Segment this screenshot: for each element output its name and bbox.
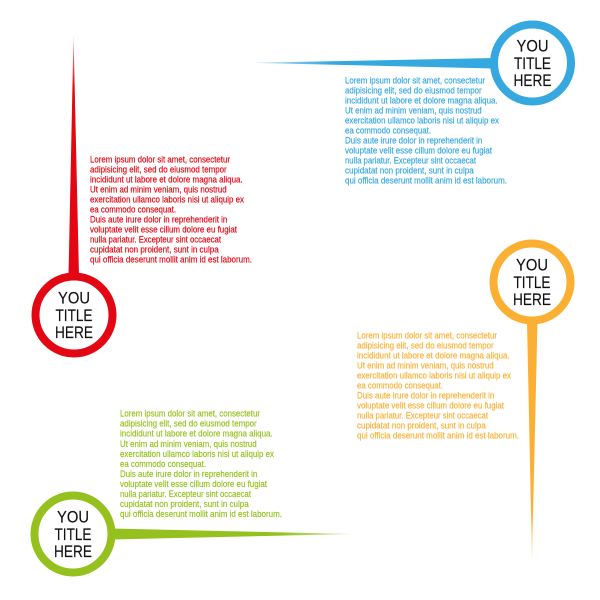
blue title circle — [494, 24, 571, 102]
orange body text: nulla pariatur. Excepteur sint occaecat — [357, 410, 488, 420]
red title circle: TITLE — [56, 307, 92, 325]
orange title circle: HERE — [513, 291, 551, 309]
blue body text: ea commodo consequat. — [345, 126, 431, 136]
green body text — [120, 409, 282, 519]
green body text: Ut enim ad minim veniam, quis nostrud — [120, 439, 257, 449]
green title circle: HERE — [54, 543, 92, 561]
red body text: voluptate velit esse cillum dolore eu fugiat — [90, 224, 237, 234]
red title circle: HERE — [55, 324, 93, 342]
red pointer spike — [68, 35, 79, 276]
blue body text: incididunt ut labore et dolore magna aliqua. — [345, 96, 498, 106]
orange body text: adipisicing elit, sed do eiusmod tempor — [357, 340, 494, 350]
red title circle: YOU — [58, 290, 90, 308]
orange body text: Lorem ipsum dolor sit amet, consectetur — [357, 330, 497, 340]
orange body text — [357, 330, 519, 440]
green title circle — [34, 496, 112, 572]
blue pointer spike — [253, 58, 494, 68]
red body text: incididunt ut labore et dolore magna aliqua. — [90, 174, 243, 184]
blue title circle: YOU — [516, 38, 548, 56]
green body text: cupidatat non proident, sunt in culpa — [120, 499, 249, 509]
orange title circle: TITLE — [514, 274, 550, 292]
green body text: incididunt ut labore et dolore magna aliqua. — [120, 429, 273, 439]
green title circle: YOU — [57, 508, 89, 526]
orange body text: incididunt ut labore et dolore magna aliqua. — [357, 350, 510, 360]
blue body text: Duis aute irure dolor in reprehenderit in — [345, 136, 482, 146]
orange body text: voluptate velit esse cillum dolore eu fugiat — [357, 400, 504, 410]
orange title circle: YOU — [516, 256, 548, 274]
panel: red callout — [36, 35, 252, 354]
blue body text: adipisicing elit, sed do eiusmod tempor — [345, 86, 482, 96]
blue body text: voluptate velit esse cillum dolore eu fugiat — [345, 146, 492, 156]
green pointer spike — [112, 528, 354, 540]
green body text: nulla pariatur. Excepteur sint occaecat — [120, 489, 251, 499]
green body text: qui officia deserunt mollit anim id est laborum. — [120, 509, 282, 519]
red body text: exercitation ullamco laboris nisi ut aliquip ex — [90, 194, 244, 204]
panel: green callout — [34, 409, 354, 572]
orange pointer spike — [527, 321, 538, 560]
orange title circle — [494, 244, 570, 320]
red body text: nulla pariatur. Excepteur sint occaecat — [90, 234, 221, 244]
blue body text: Lorem ipsum dolor sit amet, consectetur — [345, 76, 485, 86]
red body text: Lorem ipsum dolor sit amet, consectetur — [90, 154, 230, 164]
panel: blue callout — [253, 24, 571, 186]
green body text: Duis aute irure dolor in reprehenderit in — [120, 469, 257, 479]
blue body text: cupidatat non proident, sunt in culpa — [345, 166, 474, 176]
red body text: ea commodo consequat. — [90, 204, 176, 214]
blue body text — [345, 76, 507, 186]
blue title circle: TITLE — [514, 55, 551, 73]
red body text: Ut enim ad minim veniam, quis nostrud — [90, 184, 227, 194]
green body text: exercitation ullamco laboris nisi ut aliquip ex — [120, 449, 274, 459]
orange body text: cupidatat non proident, sunt in culpa — [357, 420, 486, 430]
blue body text: exercitation ullamco laboris nisi ut aliquip ex — [345, 116, 499, 126]
orange body text: qui officia deserunt mollit anim id est laborum. — [357, 430, 519, 440]
green body text: Lorem ipsum dolor sit amet, consectetur — [120, 409, 260, 419]
red body text: adipisicing elit, sed do eiusmod tempor — [90, 164, 227, 174]
red body text: Duis aute irure dolor in reprehenderit in — [90, 214, 227, 224]
orange body text: Ut enim ad minim veniam, quis nostrud — [357, 360, 494, 370]
red title circle — [36, 276, 112, 354]
green body text: voluptate velit esse cillum dolore eu fugiat — [120, 479, 267, 489]
green title circle: TITLE — [54, 526, 92, 544]
blue body text: qui officia deserunt mollit anim id est laborum. — [345, 176, 507, 186]
blue body text: nulla pariatur. Excepteur sint occaecat — [345, 156, 476, 166]
panel: orange callout — [357, 244, 570, 560]
blue body text: Ut enim ad minim veniam, quis nostrud — [345, 106, 482, 116]
orange body text: ea commodo consequat. — [357, 380, 443, 390]
red body text: qui officia deserunt mollit anim id est laborum. — [90, 254, 252, 264]
red body text: cupidatat non proident, sunt in culpa — [90, 244, 219, 254]
orange body text: exercitation ullamco laboris nisi ut aliquip ex — [357, 370, 511, 380]
green body text: adipisicing elit, sed do eiusmod tempor — [120, 419, 257, 429]
red body text — [90, 154, 252, 264]
green body text: ea commodo consequat. — [120, 459, 206, 469]
orange body text: Duis aute irure dolor in reprehenderit in — [357, 390, 494, 400]
blue title circle: HERE — [514, 72, 552, 90]
